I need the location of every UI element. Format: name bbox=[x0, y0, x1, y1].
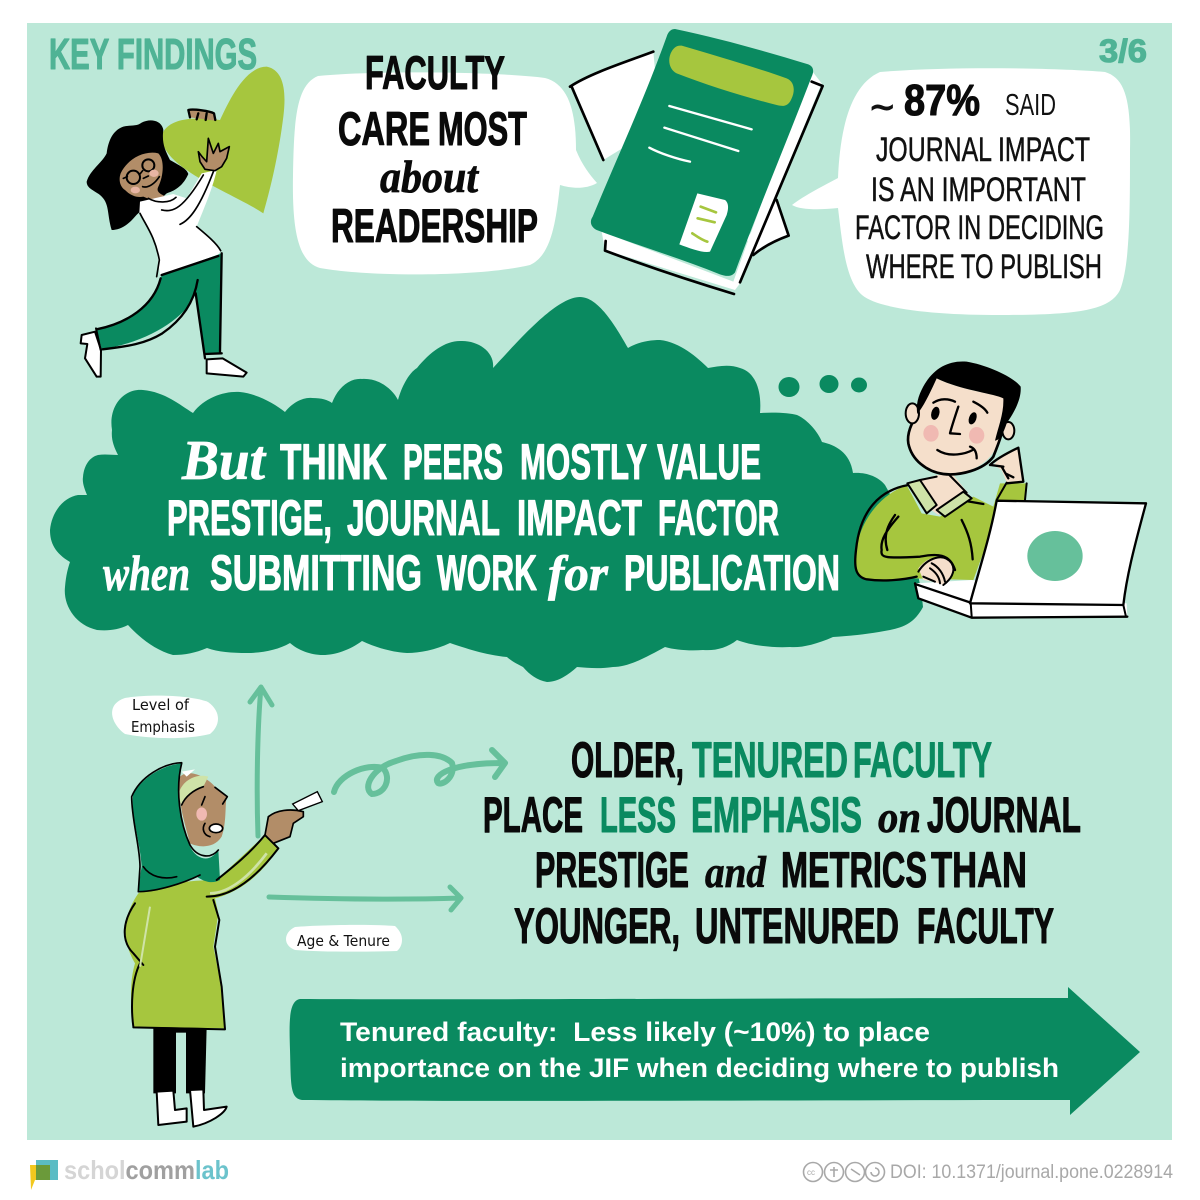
text: peers value prestige: PRESTIGE, bbox=[167, 490, 332, 546]
headline: older tenured faculty: YOUNGER, bbox=[514, 898, 680, 954]
text: peers value prestige: SUBMITTING bbox=[210, 545, 422, 601]
thought cloud bbox=[50, 297, 923, 682]
text: journal impact statistic: 87% bbox=[904, 76, 980, 125]
speech bubble: readership bbox=[293, 46, 597, 274]
text: journal impact statistic: WHERE TO PUBLISH bbox=[866, 248, 1102, 286]
thought dots bbox=[778, 375, 867, 397]
axis label: level of emphasis: Level of bbox=[132, 696, 190, 714]
text: faculty care most about readership: about bbox=[380, 151, 479, 202]
text: faculty care most about readership: FACULTY bbox=[365, 46, 505, 99]
text: peers value prestige: JOURNAL bbox=[347, 490, 500, 546]
headline: older tenured faculty: and bbox=[705, 848, 767, 897]
headline: older tenured faculty: OLDER, bbox=[571, 732, 684, 788]
text: peers value prestige: FACTOR bbox=[658, 490, 779, 546]
headline: older tenured faculty: LESS bbox=[600, 787, 676, 843]
axis label: age and tenure bbox=[286, 925, 402, 952]
text: peers value prestige: when bbox=[103, 545, 190, 601]
footer logo: scholcommlab: scholcommlab bbox=[64, 1155, 229, 1185]
illustration: man at laptop bbox=[855, 361, 1146, 618]
heading: key findings: KEY FINDINGS bbox=[49, 30, 257, 79]
text: peers value prestige: for bbox=[548, 545, 609, 601]
axis label: age and tenure: Age & Tenure bbox=[297, 932, 390, 950]
axis label: level of emphasis: Emphasis bbox=[131, 718, 195, 736]
text: journal impact statistic: JOURNAL IMPACT bbox=[876, 131, 1090, 169]
illustration: woman holding heart bbox=[81, 67, 284, 377]
page number: 3/6 bbox=[1099, 33, 1147, 69]
text: faculty care most about readership bbox=[331, 46, 538, 252]
headline: older tenured faculty: FACULTY bbox=[853, 732, 992, 788]
text: peers value prestige: PEERS bbox=[403, 434, 503, 490]
text: journal impact statistic bbox=[855, 76, 1104, 286]
callout arrow: tenured faculty bbox=[290, 987, 1140, 1115]
headline: older tenured faculty: PLACE bbox=[483, 787, 583, 843]
footer license icons bbox=[804, 1162, 884, 1182]
text: journal impact statistic: IS AN IMPORTANT bbox=[871, 171, 1086, 209]
callout arrow: tenured faculty: Tenured faculty: Less likely (~10%) to place bbox=[340, 1017, 930, 1047]
text: peers value prestige: VALUE bbox=[657, 434, 761, 490]
headline: older tenured faculty: JOURNAL bbox=[927, 787, 1081, 843]
chart axis: horizontal age and tenure bbox=[269, 887, 461, 910]
headline: older tenured faculty: FACULTY bbox=[917, 898, 1054, 954]
text: peers value prestige: IMPACT bbox=[517, 490, 642, 546]
arrow: curly arrow to text bbox=[334, 750, 505, 794]
headline: older tenured faculty: METRICS bbox=[781, 842, 927, 898]
text: journal impact statistic: SAID bbox=[1005, 87, 1056, 122]
headline: older tenured faculty: THAN bbox=[931, 842, 1027, 898]
text: peers value prestige: THINK bbox=[280, 434, 387, 490]
text: faculty care most about readership: READERSHIP bbox=[331, 199, 538, 252]
headline: older tenured faculty: UNTENURED bbox=[695, 898, 899, 954]
chart axis: vertical level of emphasis bbox=[250, 687, 272, 836]
illustration: journal book bbox=[570, 29, 823, 294]
callout arrow: tenured faculty: importance on the JIF when deciding where to publish bbox=[340, 1053, 1059, 1083]
axis label: level of emphasis bbox=[112, 696, 218, 738]
text: faculty care most about readership: MOST bbox=[438, 102, 527, 155]
headline: older tenured faculty: PRESTIGE bbox=[535, 842, 689, 898]
text: journal impact statistic: ~ bbox=[868, 87, 896, 127]
footer license icons: cc bbox=[807, 1168, 815, 1177]
headline: older tenured faculty: EMPHASIS bbox=[691, 787, 862, 843]
text: peers value prestige: PUBLICATION bbox=[624, 545, 840, 601]
speech bubble: 87 percent bbox=[792, 68, 1130, 315]
text: peers value prestige: But bbox=[181, 430, 266, 492]
illustration: woman at chalkboard bbox=[125, 763, 322, 1127]
text: peers value prestige bbox=[103, 430, 840, 601]
footer doi: DOI: 10.1371/journal.pone.0228914 bbox=[890, 1162, 1173, 1183]
text: peers value prestige: WORK bbox=[437, 545, 537, 601]
headline: older tenured faculty: TENURED bbox=[692, 732, 848, 788]
text: peers value prestige: MOSTLY bbox=[520, 434, 647, 490]
headline: older tenured faculty bbox=[483, 732, 1081, 954]
text: faculty care most about readership: CARE bbox=[338, 102, 430, 155]
headline: older tenured faculty: on bbox=[878, 793, 921, 842]
